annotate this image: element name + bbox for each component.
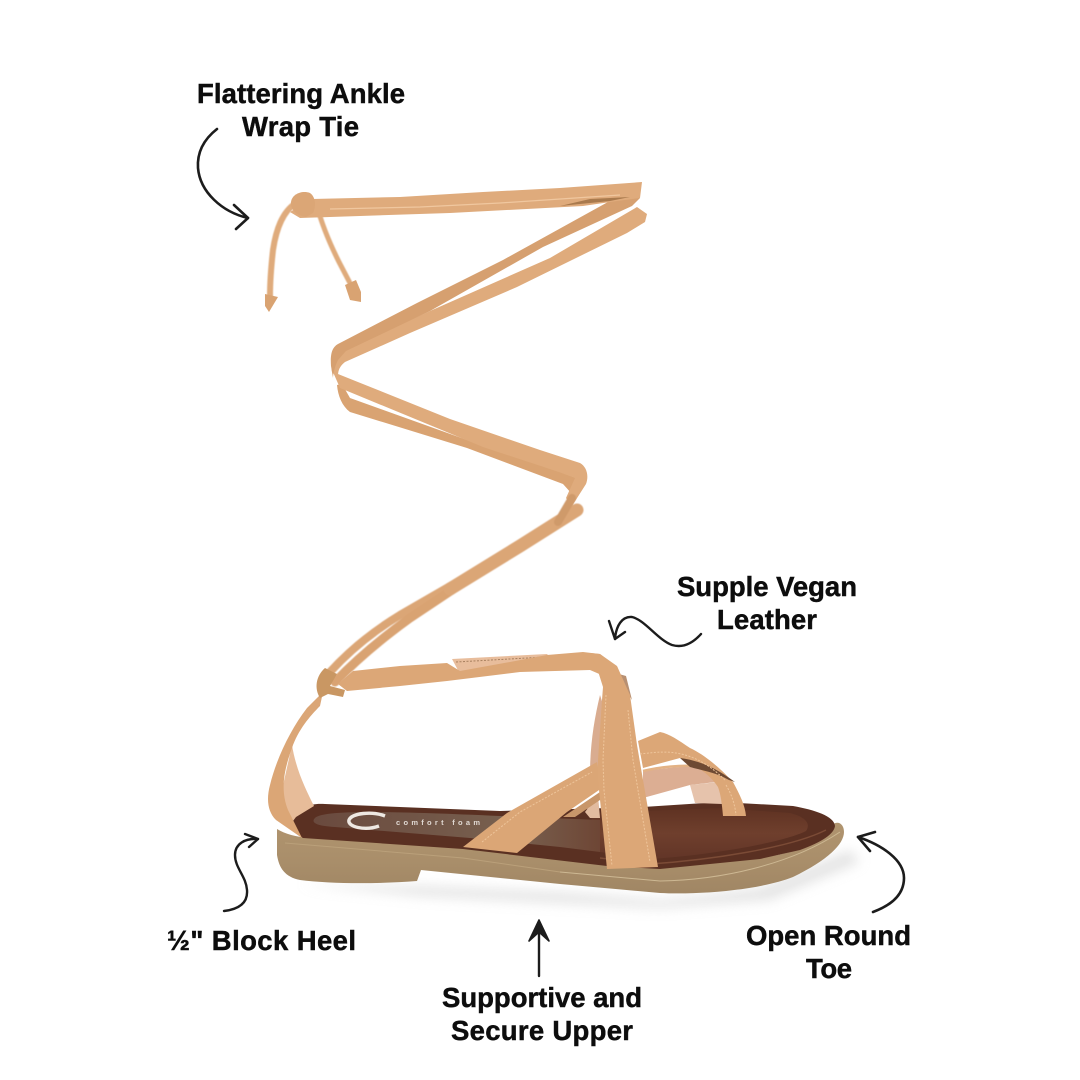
illustration: lace-up sandal [265, 182, 860, 908]
back heel strap [268, 692, 323, 838]
arrow: to upper [529, 920, 549, 976]
knot [291, 192, 315, 217]
toe footbed [590, 808, 808, 859]
lining patch [452, 654, 560, 674]
lower calf strand [337, 384, 576, 494]
label: Supportive and Secure Upper [442, 982, 642, 1046]
comfort foam logo: comfort foam [396, 818, 480, 827]
ankle loop [317, 668, 345, 698]
first diagonal strand [331, 197, 640, 378]
label: Flattering Ankle Wrap Tie: Flattering Ankle [197, 78, 405, 109]
label: Open Round Toe [746, 920, 911, 984]
ground shadow [300, 850, 860, 908]
arrow: to block heel [224, 834, 258, 911]
second diagonal strand [331, 207, 647, 376]
ankle horizontal strap [338, 652, 618, 691]
arrow: to ankle wrap tie [198, 129, 248, 229]
arrow: to vegan leather strap [609, 617, 701, 646]
label: Flattering Ankle Wrap Tie: Wrap Tie [242, 111, 359, 142]
sole [277, 823, 844, 893]
label: half inch block heel: ½" Block Heel [167, 925, 356, 956]
label: Supportive and Secure Upper: Supportive and [442, 982, 642, 1013]
toe loop linings [690, 782, 722, 804]
tie tails [270, 203, 351, 296]
label: Supple Vegan Leather: Supple Vegan [677, 571, 857, 602]
back heel lining [282, 745, 314, 825]
top band [290, 182, 642, 218]
label: Supportive and Secure Upper: Secure Upper [451, 1015, 633, 1046]
toe strap [638, 732, 746, 816]
label: Open Round Toe: Toe [806, 953, 852, 984]
arrow: to open toe [858, 832, 904, 912]
strands towards ankle [330, 498, 577, 682]
forward cross strap [463, 762, 602, 853]
tie tips [265, 294, 278, 312]
label: Open Round Toe: Open Round [746, 920, 911, 951]
heel insole with logo [314, 812, 600, 852]
vertical cross strap [590, 653, 658, 869]
upper calf strand [333, 372, 587, 506]
footbed [290, 802, 835, 869]
comfort foam logo [349, 813, 480, 828]
rear lining behind vertical strap [590, 695, 608, 790]
label: Supple Vegan Leather: Leather [717, 604, 817, 635]
label: Flattering Ankle Wrap Tie [197, 78, 405, 142]
label: Supple Vegan Leather [677, 571, 857, 635]
